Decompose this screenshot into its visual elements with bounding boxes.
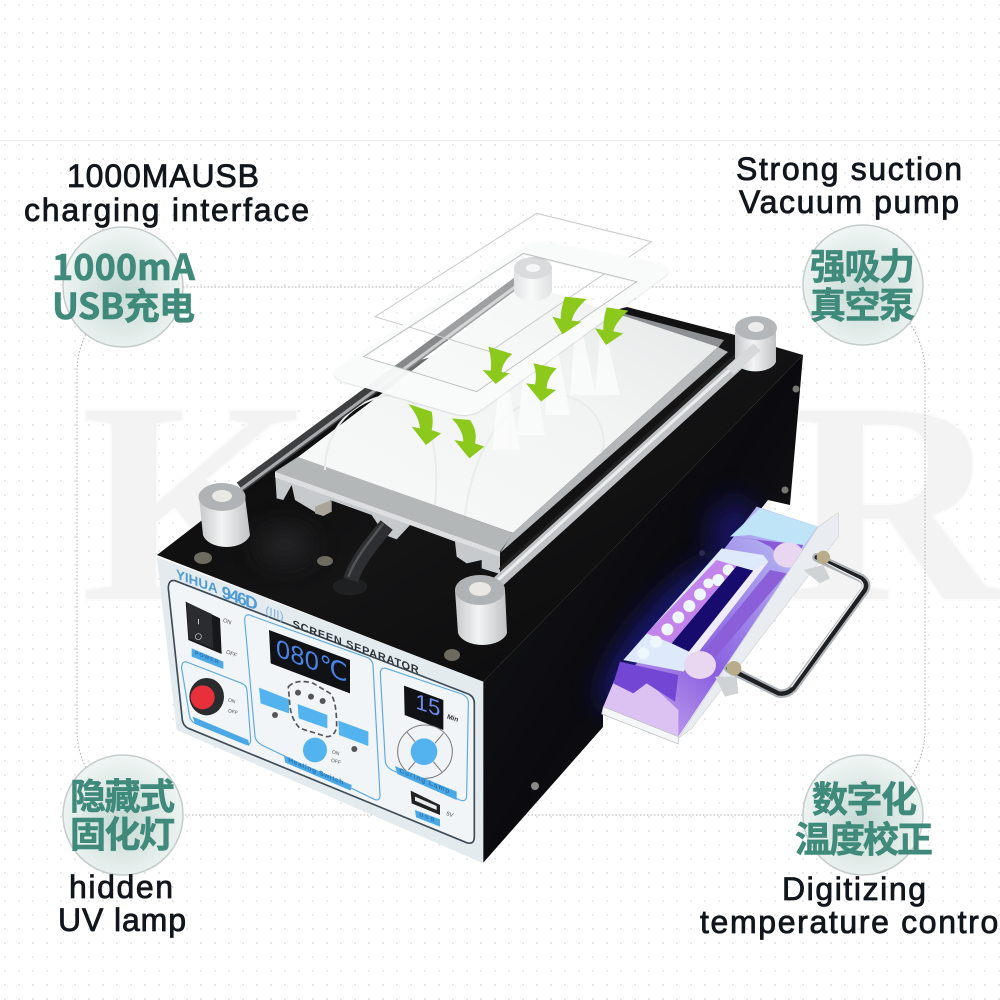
screws on top [194, 552, 460, 661]
glass panel and bezel overlay [334, 213, 668, 458]
curing lamp label: Curing Lamp [399, 768, 449, 795]
right rail [498, 341, 757, 582]
dotted connector frame [77, 287, 925, 815]
machine [157, 213, 866, 863]
curing lamp dial [398, 725, 452, 778]
heating switch label: Heating Switch [288, 757, 343, 787]
back frame strip [618, 312, 724, 348]
suction cups [492, 330, 620, 450]
power switch [186, 602, 238, 669]
white drawer lip [602, 707, 678, 744]
vacuum tube [333, 523, 387, 595]
heading: temperature control: Digitizing [782, 871, 926, 907]
brand: 946D [222, 582, 258, 615]
timer display [404, 686, 459, 730]
timer display: Min [446, 714, 459, 724]
heading: vacuum pump: Vacuum pump [739, 184, 959, 220]
red button [189, 678, 238, 717]
handle mounts [715, 551, 830, 697]
aluminium profile [275, 472, 500, 574]
heading: temperature control [700, 871, 1000, 940]
red button: ON [227, 697, 236, 705]
USB port: USB [419, 812, 434, 824]
product name: SCREEN SEPARATOR [293, 619, 419, 677]
blue outlined boxes [182, 615, 468, 801]
handle [728, 557, 866, 694]
post: back right [735, 316, 777, 371]
USB port: 5V [445, 811, 454, 819]
haze over machine [363, 253, 637, 392]
callout: temperature calibration [795, 755, 933, 875]
post: front left [198, 483, 250, 547]
red button: OFF [227, 708, 238, 717]
brand [176, 567, 284, 624]
white bezel [334, 242, 668, 415]
glass panel [375, 213, 652, 352]
callout: vacuum pump: 真空泵 [810, 277, 915, 329]
power switch: ON [222, 618, 232, 626]
heading: vacuum pump [736, 151, 962, 220]
curing lamp label [395, 766, 457, 800]
temperature display: 080℃ [276, 633, 348, 688]
callout: USB charging: 1000mA [52, 239, 196, 291]
power switch: POWER [195, 650, 218, 666]
front control panel: OFF [330, 758, 341, 766]
aluminium lip [275, 457, 513, 552]
front control panel: ON [331, 749, 340, 757]
body right face [483, 355, 803, 863]
post: front right [455, 575, 507, 645]
heading: USB interface [24, 158, 309, 228]
rail over back post [730, 347, 757, 371]
white vacuum plate [298, 285, 718, 533]
heading: vacuum pump: Strong suction [736, 151, 962, 187]
body top face [157, 307, 803, 682]
UV curing drawer [602, 507, 866, 744]
heading: temperature control: temperature control [700, 904, 1000, 940]
callout: temperature calibration: 温度校正 [795, 811, 933, 863]
post: back left [514, 257, 552, 301]
USB port [411, 791, 454, 827]
power switch: OFF [225, 650, 238, 659]
callout: vacuum pump: 强吸力 [810, 238, 915, 290]
callout: temperature calibration: 数字化 [812, 771, 917, 823]
white drawer face [678, 513, 838, 738]
timer display: 15 [415, 689, 440, 721]
heading: USB interface: charging interface [24, 192, 309, 228]
plate right strip [500, 347, 728, 553]
callout: USB charging: USB充电 [52, 278, 195, 330]
callout: hidden lamp: 固化灯 [70, 806, 175, 858]
watermark text: KOOR [80, 342, 1000, 663]
callout: vacuum pump [803, 225, 923, 345]
brand: (III) [265, 603, 284, 624]
callout: USB charging [52, 227, 196, 347]
feet under the profile [315, 500, 332, 516]
green arrows [408, 297, 628, 458]
plate top and frame [275, 457, 513, 595]
heading: USB interface: 1000MAUSB [67, 158, 259, 194]
left rail [240, 278, 523, 490]
heading: hidden lamp [58, 869, 186, 938]
LED module [623, 548, 768, 672]
heating switch label [284, 756, 352, 791]
heating buttons [259, 688, 368, 762]
callout: hidden lamp [63, 755, 183, 875]
brand: YIHUA [176, 567, 218, 597]
faint plate arcs [325, 395, 604, 515]
callout: hidden lamp: 隐藏式 [70, 768, 175, 820]
heading: hidden lamp: UV lamp [58, 902, 186, 938]
heading: hidden lamp: hidden [69, 869, 173, 905]
front control panel [157, 557, 483, 863]
